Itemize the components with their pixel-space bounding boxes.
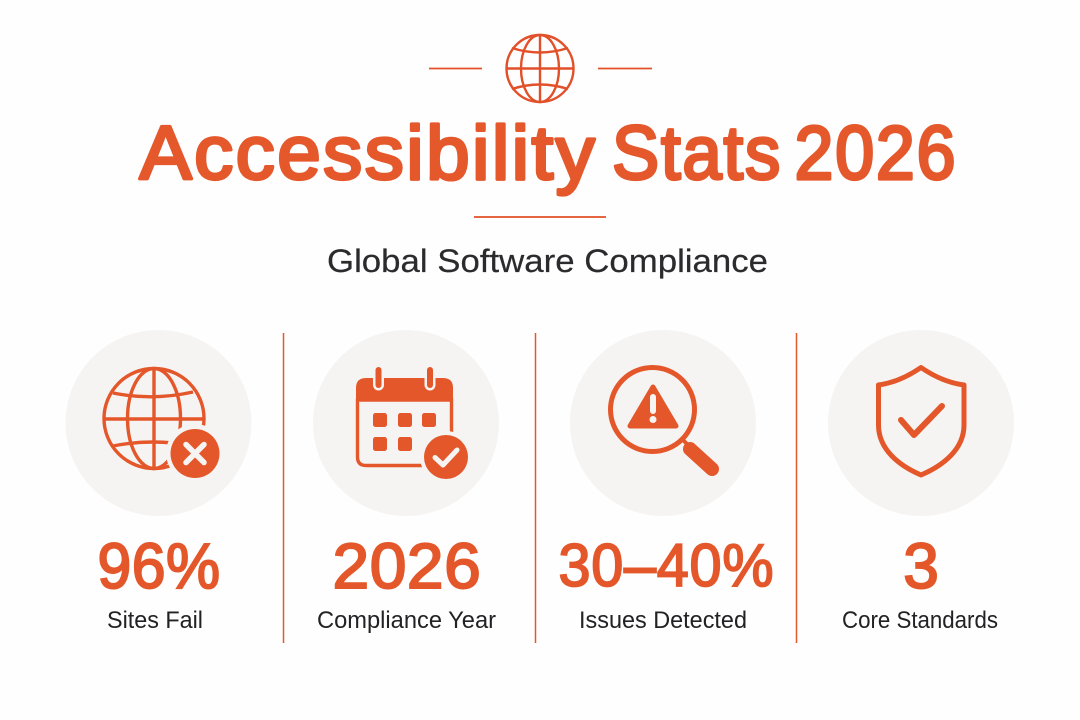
title: Stats xyxy=(612,111,780,196)
title underline xyxy=(474,216,606,218)
panel: sites fail xyxy=(66,330,252,634)
stat: 96%: 96% xyxy=(98,531,220,602)
panel: core standards xyxy=(828,330,1014,634)
icon: magnifier with warning xyxy=(570,330,756,516)
divider 3 xyxy=(796,333,798,643)
label: compliance year: Compliance Year xyxy=(317,607,496,634)
icon: calendar with check badge xyxy=(313,330,499,516)
label: sites fail: Sites Fail xyxy=(107,607,203,634)
panel: compliance year xyxy=(313,330,499,634)
icon: globe with x badge xyxy=(66,330,252,516)
title: 2026 xyxy=(794,111,955,196)
label: core standards: Core Standards xyxy=(842,607,998,634)
icon: shield with check xyxy=(828,330,1014,516)
panel: issues detected xyxy=(558,330,774,634)
stat: 30–40%: 30–40% xyxy=(558,533,774,599)
divider 1 xyxy=(282,333,284,643)
stat: 2026: 2026 xyxy=(332,530,481,602)
header globe icon with side rules xyxy=(429,35,652,102)
subtitle: Global Software Compliance xyxy=(327,243,768,279)
divider 2 xyxy=(534,333,536,643)
label: issues detected: Issues Detected xyxy=(579,607,747,634)
title xyxy=(140,111,956,196)
stat: 3: 3 xyxy=(903,530,939,602)
title: Accessibility xyxy=(140,111,595,196)
